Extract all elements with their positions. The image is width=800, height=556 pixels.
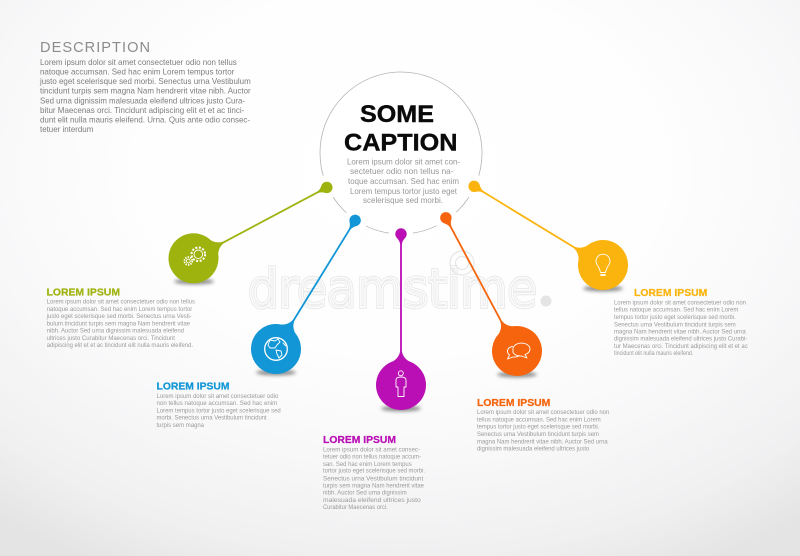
central caption <box>344 101 458 156</box>
branch: yellow <box>456 162 637 299</box>
label: magenta: turpis sem magna Nam hendrerit vitae <box>323 483 425 489</box>
label: green: adipiscing elit et et ac tincidunt elit nulla mauris eleifend. <box>47 343 193 349</box>
label: green: justo eget scelerisque sed morbi. Senectus urna Vesti- <box>46 314 192 320</box>
label: blue: Lorem tempus tortor justo eget scelerisque sed <box>156 408 281 414</box>
label: green: natoque accumsan. Sed hac enim Lorem tempus tortor <box>47 307 192 313</box>
description text: bitur Maecenas orci. Tincidunt adipiscing elit et et ac tinci- <box>40 105 244 115</box>
label: yellow: tempus tortor justo eget scelerisque sed morbi. <box>614 315 736 321</box>
label: blue: LOREM IPSUM <box>156 380 230 392</box>
description text: justo eget scelerisque sed morbi. Senectus urna Vestibulum <box>39 76 251 86</box>
label: magenta <box>323 434 425 511</box>
central text: scelerisque sed morbi. <box>363 195 443 205</box>
central text: Lorem tempus tortor justo eget <box>350 186 458 196</box>
icon: globe <box>265 338 287 360</box>
label: yellow: tur Maecenas orci. Tincidunt adipiscing elit et et ac <box>614 344 748 350</box>
icon: gears <box>184 248 205 265</box>
label: magenta: malesuada eleifend ultrices justo <box>323 498 421 504</box>
label: yellow: LOREM IPSUM <box>634 287 708 299</box>
description text: Sed urna dignissim malesuada eleifend ultrices justo Cura- <box>40 95 245 105</box>
label: green: Lorem ipsum dolor sit amet consectetuer odio non tellus <box>47 300 195 306</box>
branch: blue <box>242 202 379 383</box>
label: yellow <box>614 287 748 357</box>
icon: person <box>396 371 406 396</box>
central text: Lorem ipsum dolor sit amet con- <box>347 156 460 166</box>
label: magenta: tetuer odio non tellus natoque accum- <box>323 455 421 461</box>
description text: dunt elit nulla mauris eleifend. Urna. Quis ante odio consec- <box>40 115 250 125</box>
label: magenta: LOREM IPSUM <box>323 434 396 446</box>
label: magenta: san. Sed hac enim Lorem tempus <box>323 462 412 468</box>
label: orange: tempus tortor justo eget scelerisque sed morbi. <box>477 425 600 431</box>
branch: green <box>160 163 344 292</box>
label: yellow: tincidunt elit nulla mauris eleifend. <box>614 351 694 357</box>
label: magenta: Senectus urna Vestibulum tincidunt <box>323 476 424 482</box>
central text: sectetuer odio non tellus na- <box>350 166 454 176</box>
label: orange <box>477 397 609 452</box>
branch: orange <box>421 201 551 385</box>
label: orange: Senectus urna Vestibulum tincidunt turpis sem <box>477 432 599 438</box>
label: orange: tellus natoque accumsan. Sed hac enim Lorem <box>477 417 601 423</box>
label: green: ultrices justo Curabitur Maecenas orci. Tincidunt <box>47 336 175 342</box>
label: blue: non tellus natoque accumsan. Sed hac enim <box>156 401 277 407</box>
label: orange: LOREM IPSUM <box>477 397 551 409</box>
label: magenta: tortor justo eget scelerisque sed morbi. <box>323 469 425 475</box>
description block <box>39 40 251 134</box>
label: orange: dignissim malesuada eleifend ultrices justo <box>477 446 590 452</box>
label: yellow: dignissim malesuada eleifend ultrices justo Curabi- <box>614 337 747 343</box>
label: green: bulum tincidunt turpis sem magna Nam hendrerit vitae <box>47 321 191 327</box>
label: magenta: nibh. Auctor Sed urna dignissim <box>323 491 407 497</box>
central circle <box>320 72 482 234</box>
watermark: dreamstime <box>248 259 537 320</box>
label: blue: turpis sem magna <box>156 423 205 429</box>
label: orange: Lorem ipsum dolor sit amet consectetuer odio non <box>477 410 609 416</box>
central caption: SOME <box>360 101 434 128</box>
central text: toque accumsan. Sed hac enim <box>348 176 459 186</box>
label: yellow: Senectus urna Vestibulum tincidunt turpis sem <box>614 322 736 328</box>
label: blue <box>156 380 281 429</box>
label: yellow: magna Nam hendrerit vitae nibh. Auctor Sed urna <box>614 329 746 335</box>
description text: tincidunt turpis sem magna Nam hendrerit vitae nibh. Auctor <box>40 86 251 96</box>
description text <box>39 57 251 134</box>
central text <box>347 156 460 205</box>
icon: light bulb <box>596 254 610 275</box>
label: green: nibh. Auctor Sed urna dignissim malesuada eleifend <box>47 329 184 335</box>
description heading: DESCRIPTION <box>40 40 150 56</box>
label: magenta: Lorem ipsum dolor sit amet consec- <box>323 447 420 453</box>
label: orange: magna Nam hendrerit vitae nibh. Auctor Sed urna <box>477 439 608 445</box>
label: blue: Lorem ipsum dolor sit amet consectetuer odio <box>156 394 279 400</box>
description text: natoque accumsan. Sed hac enim Lorem tempus tortor <box>40 66 234 76</box>
description text: Lorem ipsum dolor sit amet consectetuer odio non tellus <box>40 57 237 67</box>
label: yellow: tellus natoque accumsan. Sed hac enim Lorem <box>614 308 738 314</box>
description text: tetuer interdum <box>40 124 93 134</box>
central caption: CAPTION <box>344 130 458 156</box>
label: magenta: Curabitur Maecenas orci. <box>323 505 388 511</box>
icon: chat bubbles <box>507 343 530 359</box>
label: yellow: Lorem ipsum dolor sit amet consectetuer odio non <box>614 301 746 307</box>
label: green: LOREM IPSUM <box>46 286 120 298</box>
label: green <box>46 286 195 349</box>
label: blue: morbi. Senectus urna Vestibulum tincidunt <box>156 416 267 422</box>
branch: magenta <box>376 222 426 412</box>
watermark: dreamstime <box>248 259 537 320</box>
